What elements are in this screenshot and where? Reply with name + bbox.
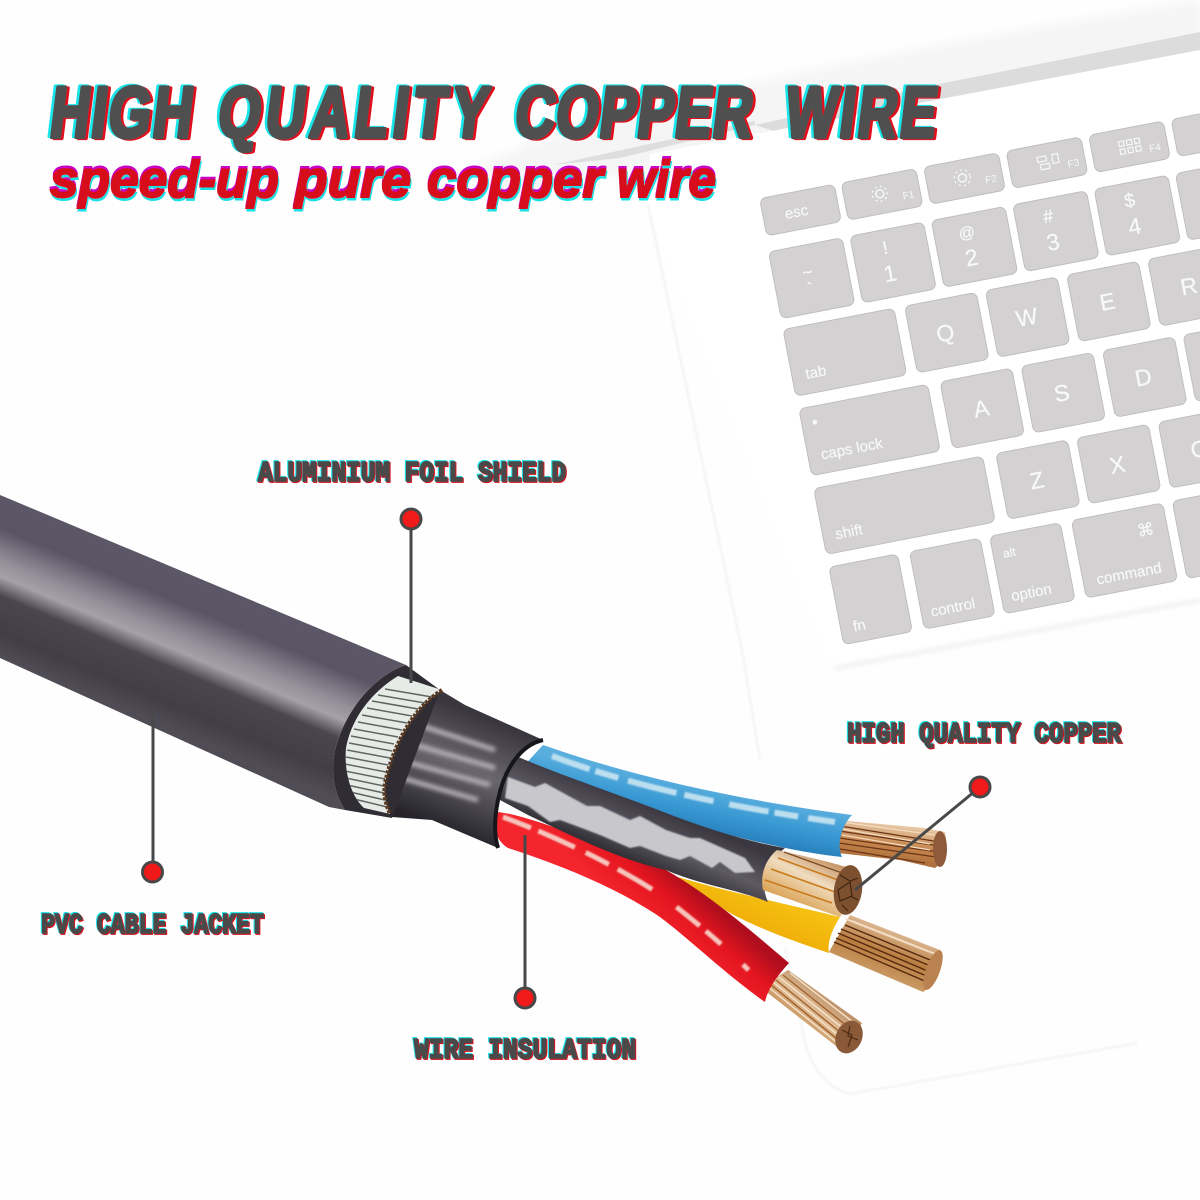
red wire — [495, 812, 789, 1002]
key: esc: esc — [783, 202, 810, 223]
red wire copper — [760, 970, 868, 1058]
title: QUALITY — [214, 72, 494, 153]
foil shield — [345, 676, 442, 814]
callout: high quality copper: HIGH QUALITY COPPER — [847, 718, 1121, 751]
number row — [768, 159, 1200, 319]
subtitle: pure — [293, 151, 411, 209]
number row: 3 — [1044, 228, 1062, 256]
key: F4 — [1089, 121, 1170, 173]
home row: D — [1133, 363, 1154, 392]
shift row: X — [1107, 451, 1127, 479]
inner jacket — [387, 690, 543, 848]
blue wire — [520, 745, 852, 857]
subtitle: wire — [617, 151, 716, 209]
bottom row: command — [1095, 559, 1163, 589]
subtitle — [50, 151, 716, 209]
title: COPPER — [511, 72, 758, 153]
key: F1: F1 — [902, 189, 916, 202]
qwerty row: E — [1097, 288, 1117, 316]
pvc jacket — [0, 495, 406, 810]
key: F4: F4 — [1148, 142, 1162, 155]
key: F2: F2 — [984, 173, 998, 187]
qwerty row: W — [1014, 302, 1040, 332]
callout: pvc cable jacket: PVC CABLE JACKET — [41, 909, 264, 942]
keyboard — [758, 105, 1200, 645]
bottom row: fn — [852, 616, 867, 635]
callout: aluminium foil shield — [258, 457, 566, 683]
home row: A — [971, 394, 992, 423]
key: F2 — [924, 153, 1005, 204]
bottom row: ⌘ — [1136, 519, 1156, 542]
number row: @ — [957, 224, 977, 243]
grey wire copper — [762, 850, 865, 917]
qwerty row: R — [1178, 272, 1199, 300]
key: F3: F3 — [1067, 158, 1081, 171]
key: F5 — [1171, 105, 1200, 157]
title: WIRE — [781, 72, 942, 153]
yellow wire copper — [829, 915, 947, 992]
background laptop — [480, 0, 1200, 1094]
subtitle: copper — [427, 151, 606, 209]
blue wire copper — [837, 820, 947, 868]
qwerty row: tab — [804, 362, 828, 383]
shift row: shift — [834, 521, 865, 543]
key: F3 — [1006, 137, 1088, 188]
bottom row: control — [929, 595, 977, 621]
home row — [799, 321, 1200, 476]
home row: caps lock — [820, 435, 885, 463]
number row: $ — [1123, 190, 1137, 212]
bottom row: alt — [1002, 545, 1018, 561]
bottom row: option — [1010, 581, 1053, 605]
qwerty row: Q — [934, 318, 957, 347]
callout: aluminium foil shield: ALUMINIUM FOIL SHIELD — [258, 457, 566, 490]
qwerty row — [783, 246, 1200, 396]
grey wire — [500, 756, 785, 902]
callout: wire insulation — [414, 835, 636, 1067]
title: HIGH — [46, 72, 198, 153]
callout: high quality copper — [847, 718, 1121, 890]
number row: 1 — [881, 259, 899, 287]
shift row: Z — [1027, 466, 1046, 494]
number row: ! — [881, 237, 890, 258]
jacket inner lip — [333, 665, 440, 818]
title — [46, 72, 942, 153]
number row: 2 — [963, 244, 980, 272]
number row: # — [1041, 206, 1055, 227]
callout: pvc cable jacket — [41, 708, 264, 942]
key: F1 — [841, 169, 923, 220]
key: esc — [760, 184, 841, 236]
number row: ` — [806, 279, 815, 299]
number row: ~ — [801, 262, 814, 283]
number row: 4 — [1126, 212, 1144, 240]
bottom row — [829, 487, 1200, 645]
home row: S — [1052, 379, 1072, 407]
callout: wire insulation: WIRE INSULATION — [414, 1034, 636, 1067]
shift row — [814, 409, 1200, 554]
subtitle: speed-up — [50, 151, 279, 209]
yellow wire — [678, 877, 840, 953]
cable — [0, 495, 947, 1058]
